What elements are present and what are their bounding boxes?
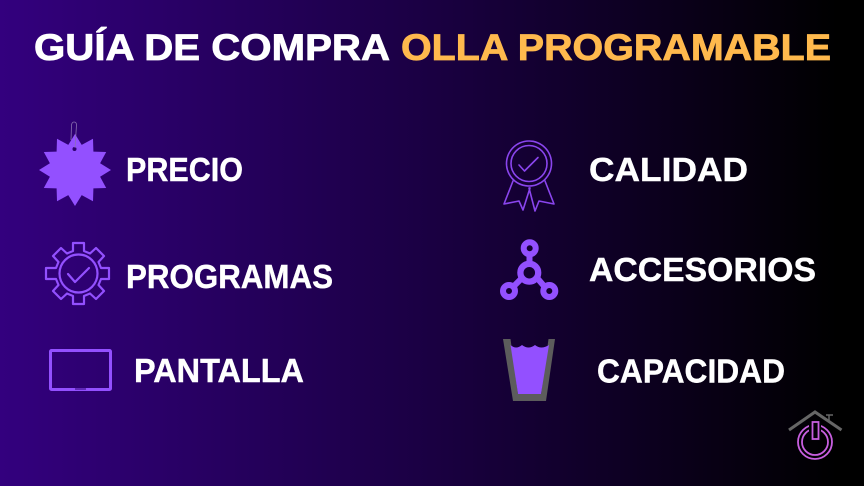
icon: tablet screen [50, 350, 110, 390]
icon: quality ribbon [504, 141, 554, 211]
icon: gear with check [46, 243, 109, 304]
label: calidad: CALIDAD [589, 151, 748, 188]
label: programas: PROGRAMAS [126, 258, 333, 295]
label: accesorios: ACCESORIOS [589, 251, 816, 288]
label: capacidad: CAPACIDAD [597, 352, 785, 390]
label: precio: PRECIO [126, 151, 243, 188]
title [34, 26, 831, 68]
title: OLLA PROGRAMABLE [401, 26, 831, 68]
icon: logo house with power symbol [789, 412, 842, 459]
title: GUÍA DE COMPRA [34, 26, 390, 68]
icon: price tag [39, 122, 111, 206]
label: pantalla: PANTALLA [134, 352, 304, 389]
icon: glass with water [503, 339, 555, 401]
icon: accessories [503, 242, 555, 297]
